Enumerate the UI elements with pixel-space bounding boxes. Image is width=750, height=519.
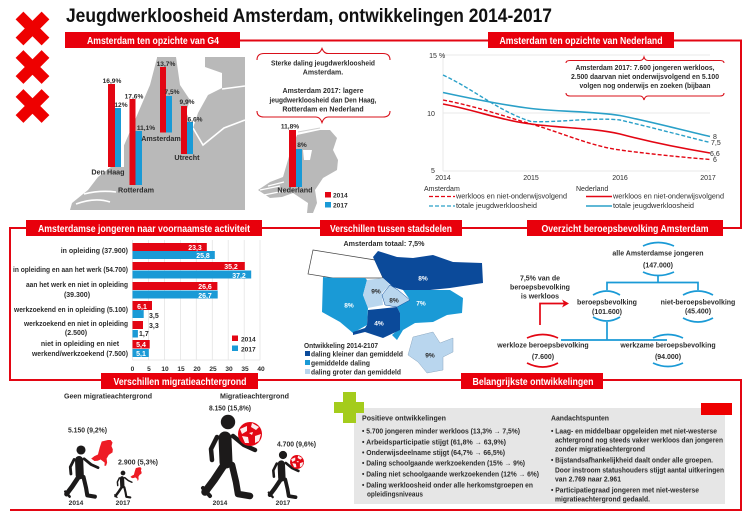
node: werkloze beroepsbevolking: werkloze beroepsbevolking <box>496 342 589 350</box>
bars: Utrecht: 6,6% <box>187 116 203 124</box>
node: werkloze beroepsbevolking <box>496 334 589 367</box>
text: aandachtspunten: zonder migratieachtergrond <box>555 446 645 454</box>
bar values: 23,3 <box>188 245 202 252</box>
bar category labels: (39.300) <box>64 292 90 299</box>
bar values: 3,3 <box>149 323 159 330</box>
heading: Amsterdam ten opzichte van G4: Amsterdam ten opzichte van G4 <box>87 36 219 47</box>
bars: Rotterdam: 11,1% <box>137 125 155 132</box>
icon: green plus <box>334 392 364 423</box>
heading: Verschillen migratieachtergrond: Verschillen migratieachtergrond <box>114 377 246 388</box>
node: alle jongeren: alle Amsterdamse jongeren <box>612 250 704 258</box>
line chart: Amsterdam vs Nederland <box>427 53 721 182</box>
node: werkloze beroepsbevolking: (7.600) <box>532 354 554 361</box>
node: werkzame beroepsbevolking: werkzame beroepsbevolking <box>619 342 716 350</box>
text: 7,5% is werkloos: beroepsbevolking <box>510 284 570 292</box>
heading: Verschillen tussen stadsdelen: Verschillen tussen stadsdelen <box>330 224 452 235</box>
legend: ontwikkeling stadsdelen: daling groter dan gemiddeld <box>311 370 401 376</box>
map with bars: Nederland <box>258 124 338 213</box>
icon: globe large <box>238 422 262 446</box>
map with bars: Nederland: 11,8% <box>281 124 299 130</box>
legend: G4: 2014 <box>333 192 348 200</box>
text: positieve ontwikkelingen <box>362 416 539 498</box>
bar axis labels: 35 <box>241 366 249 373</box>
bars: Amsterdam: Amsterdam <box>141 134 181 143</box>
legend: line chart: Nederland <box>576 186 608 193</box>
text: positieve ontwikkelingen: • Daling werkloosheid onder alle herkomstgroepen en <box>362 482 533 490</box>
text: 7,5% is werkloos: is werkloos <box>521 294 559 300</box>
bar values: 3,5 <box>149 313 159 320</box>
legend: G4 <box>325 192 348 210</box>
icon: person 2017 migratie <box>269 451 298 497</box>
bar values: 5,4 <box>136 342 146 349</box>
bar category labels <box>13 248 128 358</box>
line chart: Amsterdam vs Nederland: 2014 <box>435 175 451 182</box>
panel: G4 map with bars <box>70 57 245 210</box>
icon: person 2014 <box>65 445 98 497</box>
panel: migratieachtergrond: 2017 <box>276 500 291 507</box>
node: beroepsbevolking: beroepsbevolking <box>577 300 637 306</box>
node: niet-beroepsbevolking: niet-beroepsbevolking <box>661 300 735 306</box>
legend: line chart <box>424 186 724 210</box>
heading: Verschillen tussen stadsdelen <box>320 220 462 236</box>
bar values: 35,2 <box>224 264 238 271</box>
legend: ontwikkeling stadsdelen: Ontwikkeling 2014-2107 <box>304 343 378 350</box>
legend: ontwikkeling stadsdelen: gemiddelde daling <box>311 360 370 368</box>
bar legend: 2017 <box>241 346 256 354</box>
heading: Amsterdamse jongeren naar voornaamste activiteit <box>26 220 262 236</box>
heading: Overzicht beroepsbevolking Amsterdam: Overzicht beroepsbevolking Amsterdam <box>542 224 709 235</box>
map: stadsdelen Amsterdam: 9% <box>425 352 435 360</box>
text: aandachtspunten <box>551 416 724 504</box>
map with bars: Nederland: Nederland <box>277 186 313 194</box>
legend: G4: 2017 <box>333 202 348 210</box>
bar category labels: (2.500) <box>65 330 87 337</box>
bar axis labels: 30 <box>225 366 233 373</box>
text: aandachtspunten: van 2.769 naar 2.961 <box>555 476 621 484</box>
text: aandachtspunten: Door instroom statushouders stijgt aantal uitkeringen <box>555 468 724 474</box>
text: 7,5% is werkloos: 7,5% van de <box>520 276 560 282</box>
bars: Den Haag <box>91 78 128 176</box>
node: beroepsbevolking: (101.600) <box>592 309 622 316</box>
bar category labels: in opleiding (37.900) <box>61 248 128 255</box>
bar values <box>136 245 246 358</box>
legend: line chart: werkloos en niet-onderwijsvolgend <box>455 194 567 200</box>
callout: sterke daling: jeugdwerkloosheid dan Den Haag, <box>269 98 377 104</box>
callout: sterke daling: Sterke daling jeugdwerkloosheid <box>271 60 375 68</box>
panel: geen migratieachtergrond: 2.900 (5,3%) <box>118 460 158 466</box>
panel: geen migratieachtergrond: 2014 <box>69 500 84 507</box>
map: stadsdelen Amsterdam: 8% <box>389 298 399 304</box>
arrow: naar beroepsbevolking <box>540 300 569 325</box>
bars: Amsterdam: 7,5% <box>164 89 180 96</box>
icon: globe small <box>290 455 304 469</box>
callout: sterke daling: Rotterdam en Nederland <box>282 106 364 114</box>
node: niet-beroepsbevolking <box>661 291 735 322</box>
bar category labels: aan het werk en niet in opleiding <box>26 282 128 289</box>
callout: Amsterdam 2017 7.600 jongeren: 2.500 daarvan niet onderwijsvolgend en 5.100 <box>571 74 719 81</box>
text: aandachtspunten: migratieachtergrond gedaald. <box>555 496 650 504</box>
callout: sterke daling: Amsterdam. <box>303 70 343 76</box>
panel: migratieachtergrond: Migratieachtergrond <box>220 394 289 400</box>
text: positieve ontwikkelingen: • Arbeidsparticipatie stijgt (61,8% → 63,9%) <box>362 440 506 446</box>
text: positieve ontwikkelingen: opleidingsniveaus <box>367 492 423 498</box>
bar category labels: werkend/werkzoekend (7.500) <box>31 351 128 358</box>
bar axis labels: 40 <box>257 366 265 373</box>
line chart: Amsterdam vs Nederland: 2015 <box>523 175 539 182</box>
legend: line chart: Amsterdam <box>424 186 460 193</box>
node: werkzame beroepsbevolking: (94.000) <box>655 354 681 361</box>
node: niet-beroepsbevolking: (45.400) <box>685 308 711 316</box>
bar values: 6,1 <box>137 304 147 311</box>
bar axis labels: 5 <box>147 366 151 373</box>
bar category labels: niet in opleiding en niet <box>41 341 120 348</box>
bar axis labels <box>131 366 265 373</box>
heading: Amsterdam ten opzichte van Nederland: Amsterdam ten opzichte van Nederland <box>500 36 662 47</box>
callout: Amsterdam 2017 7.600 jongeren <box>566 57 724 100</box>
icon: red Netherlands large <box>91 440 113 466</box>
line chart: Amsterdam vs Nederland: 5 <box>431 168 435 175</box>
heading: Amsterdam ten opzichte van Nederland <box>488 32 674 48</box>
text: aandachtspunten: • Participatiegraad jongeren met niet-westerse <box>551 488 699 494</box>
legend: ontwikkeling stadsdelen <box>304 343 403 376</box>
panel: geen migratieachtergrond <box>64 394 158 507</box>
icon: person 2014 migratie <box>203 415 255 496</box>
bar values: 1,7 <box>139 331 149 338</box>
bar category labels: werkzoekend en niet in opleiding <box>23 321 128 328</box>
legend: line chart: totale jeugdwerkloosheid <box>456 203 537 210</box>
line chart: Amsterdam vs Nederland: 10 <box>427 111 435 118</box>
line chart: Amsterdam vs Nederland: 6 <box>713 157 717 164</box>
line chart: Amsterdam vs Nederland: 6,6 <box>710 151 720 158</box>
bars: Amsterdam: 13,7% <box>157 61 175 68</box>
callout: Amsterdam 2017 7.600 jongeren: volgen nog onderwijs en zoeken (bijbaan <box>580 83 710 90</box>
map: stadsdelen Amsterdam: 4% <box>374 320 384 328</box>
node: werkzame beroepsbevolking <box>619 334 716 366</box>
bar axis labels: 25 <box>209 366 217 373</box>
heading: Amsterdam ten opzichte van G4 <box>65 32 240 48</box>
bar values: 5,1 <box>136 351 146 358</box>
panel: migratieachtergrond: 4.700 (9,6%) <box>277 442 316 448</box>
bar axis labels: 20 <box>193 366 201 373</box>
text: aandachtspunten: • Bijstandsafhankelijkheid daalt onder alle groepen. <box>551 458 713 464</box>
legend: ontwikkeling stadsdelen: daling kleiner dan gemiddeld <box>311 352 403 358</box>
callout: Amsterdam 2017 7.600 jongeren: Amsterdam 2017: 7.600 jongeren werkloos, <box>576 65 715 72</box>
icon: Amsterdam crosses <box>20 16 46 119</box>
line chart: Amsterdam vs Nederland: 7,5 <box>711 140 721 147</box>
panel: geen migratieachtergrond: 5.150 (9,2%) <box>68 428 107 434</box>
node: alle jongeren <box>612 242 704 276</box>
bar axis labels: 0 <box>131 366 135 373</box>
bars: Den Haag: Den Haag <box>91 168 125 176</box>
bar legend <box>232 336 256 354</box>
map: stadsdelen Amsterdam: 8% <box>344 302 354 310</box>
line chart: Amsterdam vs Nederland: 2016 <box>612 175 628 182</box>
panel: belangrijkste ontwikkelingen <box>334 392 732 504</box>
diagram: beroepsbevolking tree <box>496 242 735 367</box>
map: stadsdelen Amsterdam: 7% <box>416 300 426 308</box>
title: Jeugdwerkloosheid Amsterdam, ontwikkelingen 2014-2017 <box>66 6 552 27</box>
callout: sterke daling: Amsterdam 2017: lagere <box>283 88 364 95</box>
text: aandachtspunten: achtergrond nog steeds vaker werkloos dan jongeren <box>555 438 723 444</box>
text: positieve ontwikkelingen: • 5.700 jongeren minder werkloos (13,3% → 7,5%) <box>362 428 520 436</box>
line chart: Amsterdam vs Nederland: % <box>439 53 445 60</box>
bars: Rotterdam <box>118 94 155 194</box>
bar values: 37,2 <box>232 273 246 280</box>
bars: Rotterdam: Rotterdam <box>118 186 154 194</box>
bar axis labels: 15 <box>177 366 185 373</box>
heading: Amsterdamse jongeren naar voornaamste activiteit: Amsterdamse jongeren naar voornaamste activiteit <box>38 224 251 235</box>
node: alle jongeren: (147.000) <box>643 262 673 270</box>
node: beroepsbevolking <box>577 291 637 321</box>
icon: red Netherlands small <box>130 467 142 481</box>
bars: Den Haag: 12% <box>114 102 128 109</box>
map: stadsdelen Amsterdam: 9% <box>371 288 381 296</box>
legend: line chart: totale jeugdwerkloosheid <box>613 203 694 210</box>
legend: line chart: werkloos en niet-onderwijsvolgend <box>612 194 724 200</box>
panel: geen migratieachtergrond: Geen migratieachtergrond <box>64 394 152 400</box>
bar category labels: werkzoekend en in opleiding (5.100) <box>13 307 128 314</box>
text: positieve ontwikkelingen: • Daling niet schoolgaande werkzoekenden (12% → 6%) <box>362 472 539 478</box>
text: aandachtspunten: Aandachtspunten <box>551 416 609 422</box>
callout: sterke daling <box>257 48 390 122</box>
bar values: 26,7 <box>198 293 212 300</box>
bar legend: 2014 <box>241 336 256 344</box>
bars <box>132 243 251 357</box>
bar values: 26,6 <box>198 284 212 291</box>
panel: geen migratieachtergrond: 2017 <box>116 500 131 507</box>
text: aandachtspunten: • Laag- en middelbaar opgeleiden met niet-westerse <box>551 428 717 436</box>
heading: Overzicht beroepsbevolking Amsterdam <box>527 220 723 236</box>
line chart: Amsterdam vs Nederland: 2017 <box>700 175 716 182</box>
icon: red minus <box>701 403 732 415</box>
map with bars: Nederland: 8% <box>297 142 307 149</box>
bars: Den Haag: 16,9% <box>103 78 121 85</box>
map: stadsdelen Amsterdam <box>308 241 483 373</box>
bar axis labels: 10 <box>161 366 169 373</box>
panel: migratieachtergrond <box>203 394 316 507</box>
panel: migratieachtergrond: 2014 <box>213 500 228 507</box>
map: stadsdelen Amsterdam: Amsterdam totaal: 7,5% <box>344 241 425 248</box>
panel: migratieachtergrond: 8.150 (15,8%) <box>209 406 251 412</box>
text: positieve ontwikkelingen: Positieve ontwikkelingen <box>362 416 446 422</box>
text: positieve ontwikkelingen: • Onderwijsdeelname stijgt (64,7% → 66,5%) <box>362 450 505 457</box>
bar category labels: in opleiding en aan het werk (54.700) <box>13 267 128 274</box>
bar chart: voornaamste activiteit <box>13 240 265 373</box>
bars: Utrecht: 9,9% <box>179 99 195 106</box>
icon: person 2017 <box>115 471 132 497</box>
text: positieve ontwikkelingen: • Daling schoolgaande werkzoekenden (15% → 9%) <box>362 460 525 468</box>
line chart: Amsterdam vs Nederland: 15 <box>429 53 437 60</box>
heading: Verschillen migratieachtergrond <box>101 373 258 389</box>
bars: Rotterdam: 17,6% <box>125 94 143 100</box>
map: stadsdelen Amsterdam: 8% <box>418 276 428 282</box>
heading: Belangrijkste ontwikkelingen <box>461 373 603 389</box>
heading: Belangrijkste ontwikkelingen: Belangrijkste ontwikkelingen <box>472 377 594 388</box>
map: West Netherlands <box>70 57 245 210</box>
bars: Amsterdam <box>141 61 181 143</box>
bars: Utrecht: Utrecht <box>174 153 200 162</box>
line chart: Amsterdam vs Nederland: 8 <box>713 134 717 141</box>
text: 7,5% is werkloos <box>510 276 570 300</box>
bars: Utrecht <box>174 99 203 162</box>
bar values: 25,8 <box>196 253 210 260</box>
